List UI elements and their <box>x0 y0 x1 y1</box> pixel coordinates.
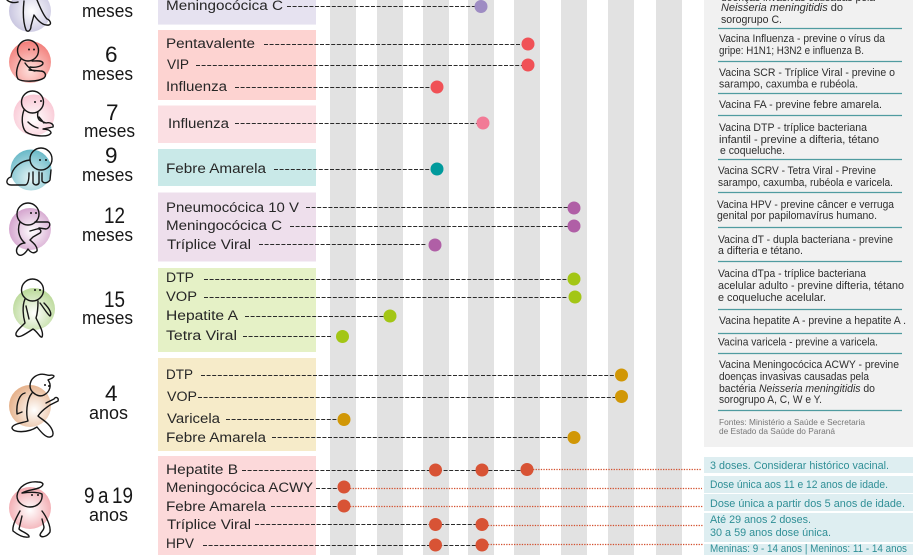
panel: vaccine descriptions: e coqueluche. <box>720 145 785 157</box>
panel: 15 meses: Hepatite A <box>166 308 239 324</box>
panel: 15 meses: DTP <box>166 270 194 286</box>
panel: vaccine descriptions: Vacina Influenza - previne o vírus da <box>719 33 885 45</box>
age label: 15 meses <box>82 287 133 328</box>
age label: 9 meses <box>82 143 133 185</box>
panel: 4 anos <box>158 358 628 451</box>
callouts: dose notes: 30 a 59 anos dose única. <box>710 527 831 539</box>
panel: vaccine descriptions: acelular adulto - previne difteria, tétano <box>718 280 904 292</box>
panel: vaccine descriptions: genital por papilomavírus humano. <box>717 210 877 222</box>
age column stripes <box>330 0 682 555</box>
panel: 12 meses <box>158 192 580 262</box>
icon: lavender baby <box>7 0 51 32</box>
callouts: dose notes: Dose única a partir dos 5 anos de idade. <box>710 498 905 510</box>
panel: 9 a 19 anos: HPV <box>166 536 195 552</box>
age label: 15 meses: meses <box>82 308 133 328</box>
age label: 7 meses: 7 <box>106 100 119 125</box>
panel: vaccine descriptions: Vacina SCR - Tríplice Viral - previne o <box>719 67 895 79</box>
age label: 9 meses: meses <box>82 165 133 185</box>
panel: vaccine descriptions: Vacina DTP - tríplice bacteriana <box>719 122 867 134</box>
age label: 12 meses: 12 <box>104 203 125 228</box>
panel: 6 meses: VIP <box>167 57 189 73</box>
panel: 6 meses <box>158 30 534 100</box>
panel: 9 meses <box>158 149 444 186</box>
panel: 4 anos: VOP <box>167 389 197 405</box>
panel: 12 meses: Tríplice Viral <box>167 237 251 253</box>
panel: vaccine descriptions: e coqueluche acelular. <box>718 292 826 304</box>
panel: 9 a 19 anos: Hepatite B <box>166 462 238 478</box>
panel: 9 a 19 anos <box>158 456 703 555</box>
panel: vaccine descriptions: sarampo, caxumba, rubéola e varicela. <box>718 177 893 189</box>
panel: 9 a 19 anos: Febre Amarela <box>166 499 266 515</box>
panel: vaccine descriptions: a difteria e tétano. <box>718 245 803 257</box>
age label: 12 meses: meses <box>82 225 133 245</box>
panel: 4 anos: Varicela <box>167 411 220 427</box>
panel: 15 meses: Tetra Viral <box>166 328 237 344</box>
panel: 7 meses: Influenza <box>168 116 229 132</box>
panel: vaccine descriptions: bactéria Neisseria meningitidis do <box>719 383 875 395</box>
panel: vaccine descriptions: Vacina dTpa - tríplice bacteriana <box>718 268 866 280</box>
panel: 15 meses: VOP <box>166 289 197 305</box>
age label: 4 anos: anos <box>89 403 128 423</box>
callouts: dose notes <box>704 457 913 555</box>
panel: vaccine descriptions: Vacina Meningocócica ACWY - previne <box>719 359 899 371</box>
panel: vaccine descriptions: gripe: H1N1; H3N2 e influenza B. <box>719 45 864 57</box>
panel: vaccine descriptions: infantil - previne a difteria, tétano <box>719 134 879 146</box>
panel: vaccine descriptions: Vacina SCRV - Tetra Viral - Previne <box>718 165 876 177</box>
age label: 6 meses: 6 <box>105 42 118 67</box>
callouts: dose notes: 3 doses. Considerar histórico vacinal. <box>710 460 889 472</box>
icon: baby 12 months <box>9 203 51 255</box>
icon: baby 6 months <box>9 40 51 83</box>
panel: 15 meses <box>158 268 582 352</box>
panel: 9 meses: Febre Amarela <box>166 161 266 177</box>
callouts: dose notes: Até 29 anos 2 doses. <box>710 514 811 526</box>
age label: 12 meses <box>82 203 133 245</box>
age label: 7 meses <box>84 100 135 141</box>
panel: vaccine descriptions <box>704 0 913 447</box>
age label: 15 meses: 15 <box>104 287 125 312</box>
icon: baby 9 months <box>7 148 52 190</box>
icon: baby 15 months <box>13 279 55 337</box>
age label: 7 meses: meses <box>84 121 135 141</box>
panel: top group <box>158 0 488 25</box>
age label: 6 meses: meses <box>82 64 133 84</box>
panel: 6 meses: Influenza <box>166 79 227 95</box>
panel: vaccine descriptions: sorogrupo A, C, W e Y. <box>719 394 822 406</box>
callouts: dose notes: Dose única aos 11 e 12 anos de idade. <box>710 479 888 491</box>
age label: 9 a 19 anos: 9 a 19 <box>84 483 133 508</box>
panel: 4 anos: Febre Amarela <box>166 430 266 446</box>
panel: vaccine descriptions: Vacina FA - previne febre amarela. <box>719 99 882 111</box>
panel: vaccine descriptions: sorogrupo C. <box>721 14 782 26</box>
age label: 9 meses: 9 <box>105 143 118 168</box>
panel: 12 meses: Pneumocócica 10 V <box>166 200 300 216</box>
icon: teenager 9 to 19 years <box>9 482 51 537</box>
panel: vaccine descriptions: Vacina hepatite A - previne a hepatite A . <box>719 315 906 327</box>
panel: 9 a 19 anos: Tríplice Viral <box>167 517 251 533</box>
panel: vaccine descriptions: doenças invasivas causadas pela <box>719 371 869 383</box>
icon: child 4 years <box>9 374 58 437</box>
panel: 7 meses <box>158 106 490 143</box>
age label: meses (top): meses <box>82 1 133 21</box>
panel: vaccine descriptions: Vacina dT - dupla bacteriana - previne <box>718 234 893 246</box>
icon: baby 7 months <box>14 91 54 136</box>
panel: vaccine descriptions: sarampo, caxumba e rubéola. <box>719 78 858 90</box>
age label: 4 anos: 4 <box>105 381 118 406</box>
panel: vaccine descriptions: Vacina varicela - previne a varicela. <box>718 336 878 348</box>
panel: vaccine descriptions: de Estado da Saúde do Paraná <box>719 426 835 436</box>
panel: vaccine descriptions: Vacina HPV - previne câncer e verruga <box>717 199 894 211</box>
panel: 12 meses: Meningocócica C <box>166 218 282 234</box>
panel: 4 anos: DTP <box>166 367 193 383</box>
age label: 4 anos <box>89 381 128 423</box>
panel: vaccine descriptions: Neisseria meningitidis do <box>721 2 843 14</box>
panel: 9 a 19 anos: Meningocócica ACWY <box>166 480 314 496</box>
panel: 6 meses: Pentavalente <box>166 36 255 52</box>
age label: 9 a 19 anos: anos <box>89 505 128 525</box>
age label: 9 a 19 anos <box>84 483 133 525</box>
age label: 6 meses <box>82 42 133 84</box>
panel: vaccine descriptions: Fontes: Ministério a Saúde e Secretaria <box>719 417 865 427</box>
